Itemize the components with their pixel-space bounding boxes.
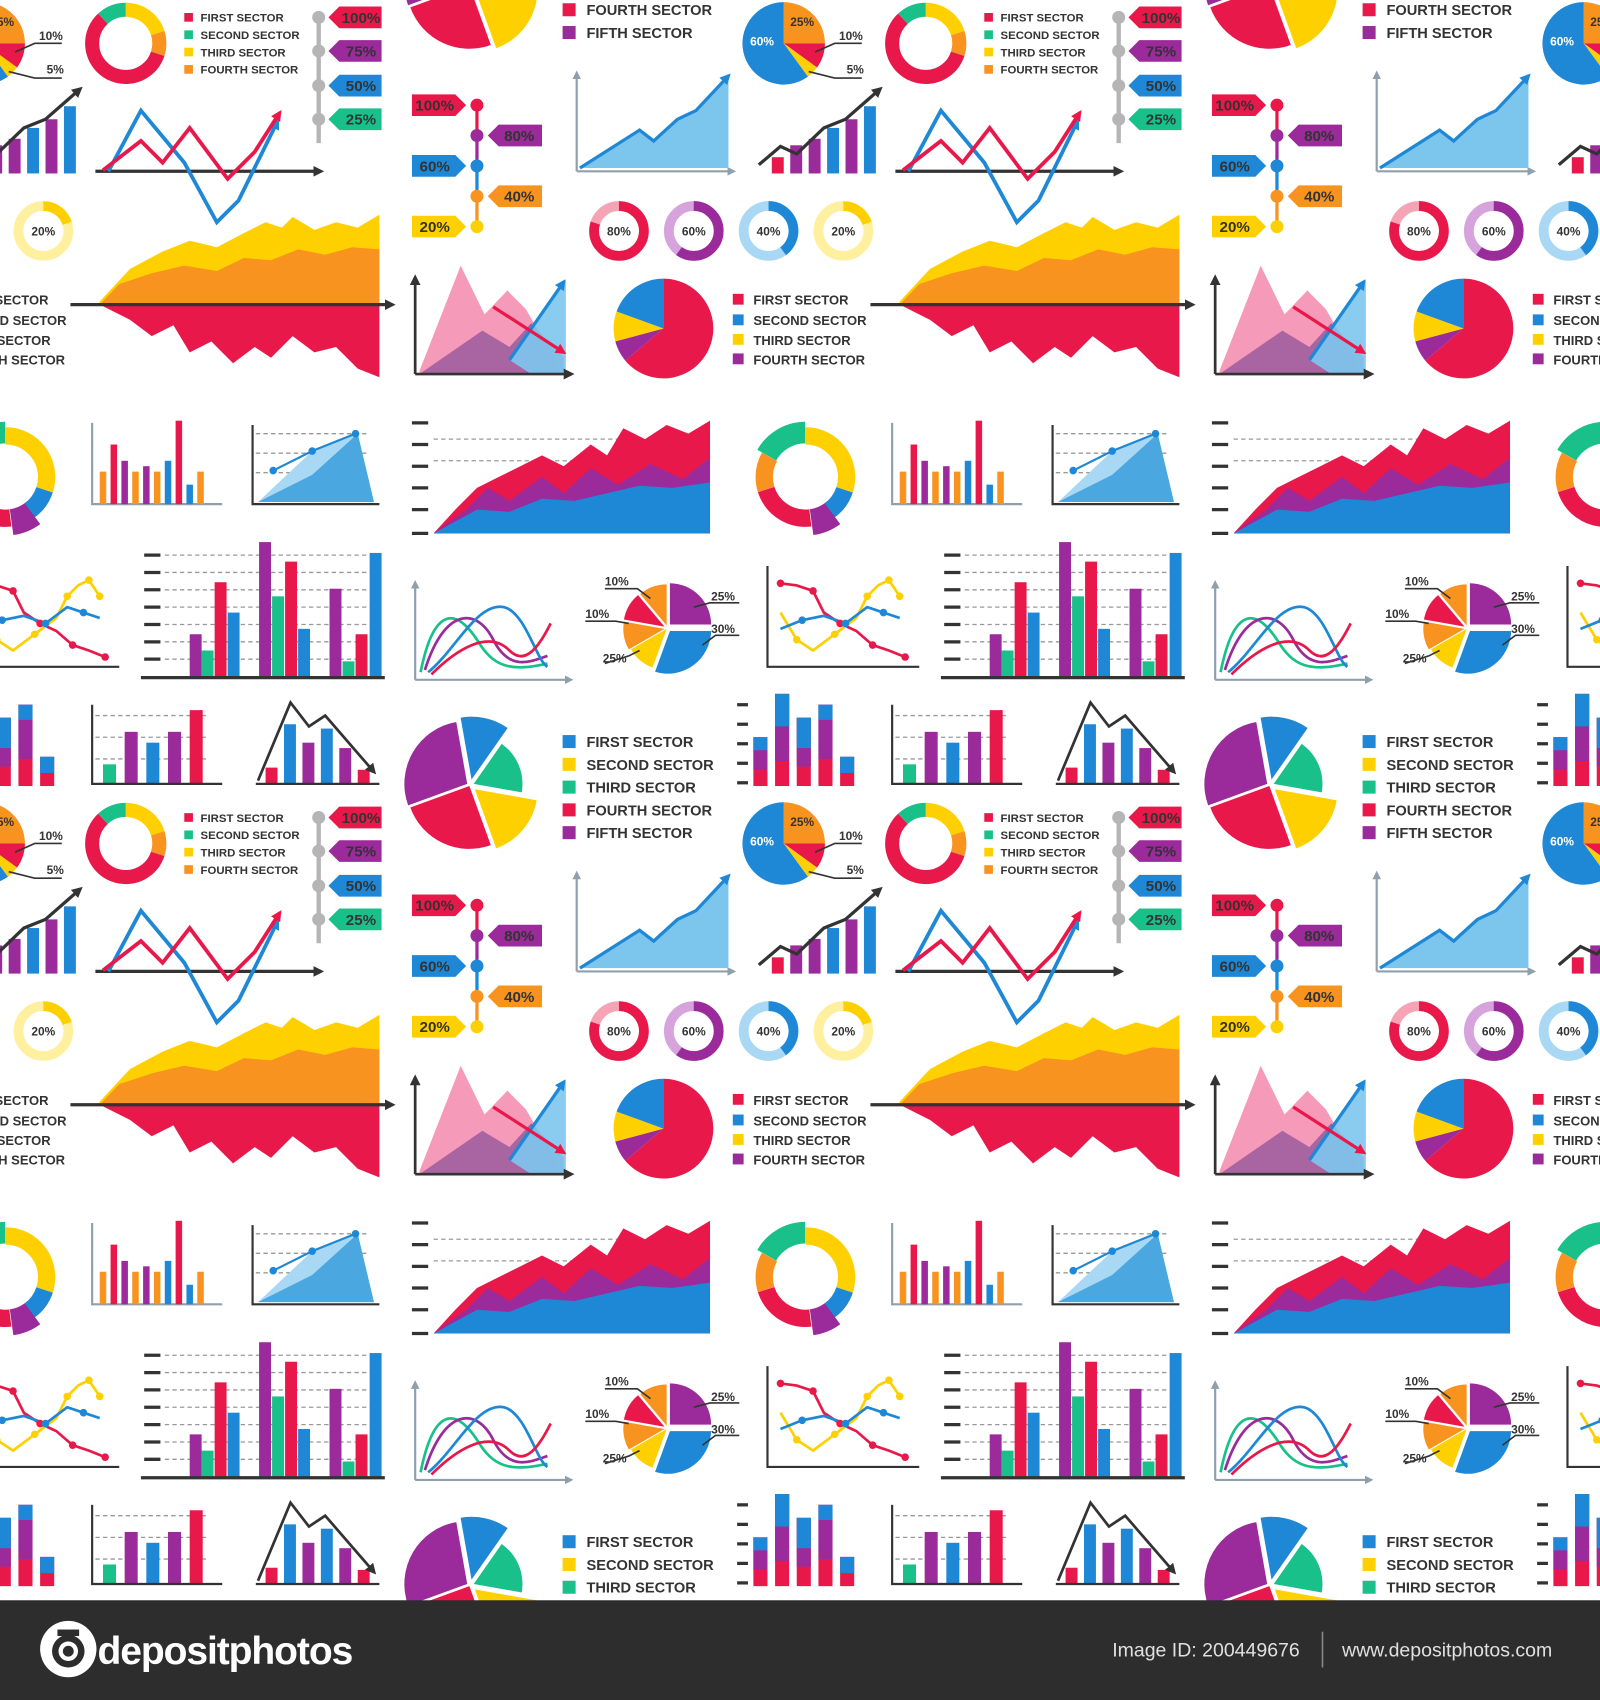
percentage ring donuts: 20% <box>831 224 856 238</box>
legend five sectors <box>563 735 714 842</box>
legend five sectors: FIRST SECTOR <box>586 735 694 751</box>
donut chart with legend: FIRST SECTOR <box>201 13 284 25</box>
exploded pie with percent labels: 10% <box>605 574 629 588</box>
percentage ring donuts: 60% <box>682 224 706 238</box>
exploded pie with five sectors <box>404 717 537 849</box>
timeline percent tags 1: 75% <box>346 43 377 60</box>
exploded pie with percent labels <box>585 574 739 674</box>
legend four sectors: THIRD SECTOR <box>753 333 851 348</box>
donut chart with legend <box>92 10 300 77</box>
timeline percent tags 2: 20% <box>420 219 450 236</box>
pie chart 60% <box>742 2 864 85</box>
timeline percent tags 2: 100% <box>415 98 455 115</box>
triangle area chart <box>415 266 571 374</box>
zigzag line chart <box>95 111 321 222</box>
legend four sectors: FOURTH SECTOR <box>753 352 866 367</box>
legend five sectors: FIFTH SECTOR <box>586 826 693 842</box>
footer bar <box>0 1600 1600 1700</box>
donut chart with legend: FOURTH SECTOR <box>201 65 298 77</box>
bar chart with dashed guides <box>92 705 222 784</box>
legend five sectors: THIRD SECTOR <box>586 781 696 797</box>
footer bar: Image ID: 200449676 <box>1112 1640 1300 1662</box>
donut chart with legend: THIRD SECTOR <box>201 47 286 59</box>
legend five sectors: SECOND SECTOR <box>586 758 714 774</box>
timeline percent tags 1: 50% <box>346 78 377 95</box>
legend five sectors: FOURTH SECTOR <box>586 803 713 819</box>
pie chart four sectors <box>614 279 713 378</box>
dashed triangle area chart <box>253 425 379 504</box>
legend four sectors: FIRST SECTOR <box>753 293 849 308</box>
footer bar: depositphotos <box>98 1630 353 1673</box>
dotted line chart <box>767 566 919 667</box>
small bar chart <box>92 421 222 504</box>
exploded pie with percent labels: 10% <box>585 607 610 621</box>
timeline percent tags 2 <box>412 94 542 237</box>
exploded pie with percent labels: 25% <box>711 590 735 604</box>
big grouped bar chart <box>141 542 385 678</box>
pie chart 60%: 5% <box>847 63 864 77</box>
exploded pie with percent labels: 25% <box>603 651 627 665</box>
footer bar: www.depositphotos.com <box>1341 1640 1552 1662</box>
timeline percent tags 2: 40% <box>504 189 535 206</box>
percentage ring donuts: 80% <box>607 224 631 238</box>
mountain area chart <box>70 215 392 377</box>
triangle bar chart with arrow <box>256 703 379 784</box>
percentage ring donuts: 40% <box>757 224 781 238</box>
wave curves chart <box>415 583 570 680</box>
stacked bar chart <box>737 694 854 786</box>
exploded pie with percent labels: 30% <box>711 622 735 636</box>
icon: camera logo <box>40 1621 96 1677</box>
legend four sectors: SECOND SECTOR <box>753 313 867 328</box>
percentage ring donuts <box>594 206 868 256</box>
segmented donut <box>760 432 851 523</box>
pie chart 60%: 60% <box>750 35 774 49</box>
pattern tile <box>70 2 919 849</box>
layered area chart <box>412 421 710 533</box>
pie chart 60%: 25% <box>790 15 814 29</box>
donut chart with legend: SECOND SECTOR <box>201 30 300 42</box>
timeline percent tags 1: 100% <box>342 10 381 27</box>
timeline percent tags 2: 60% <box>420 158 450 175</box>
timeline percent tags 1: 25% <box>346 112 377 129</box>
pie chart 60%: 10% <box>839 29 863 43</box>
legend four sectors <box>733 293 867 367</box>
timeline percent tags 1 <box>312 7 382 143</box>
bar chart with rising arrow <box>759 89 880 173</box>
timeline percent tags 2: 80% <box>504 128 535 145</box>
blue area chart <box>577 74 733 171</box>
